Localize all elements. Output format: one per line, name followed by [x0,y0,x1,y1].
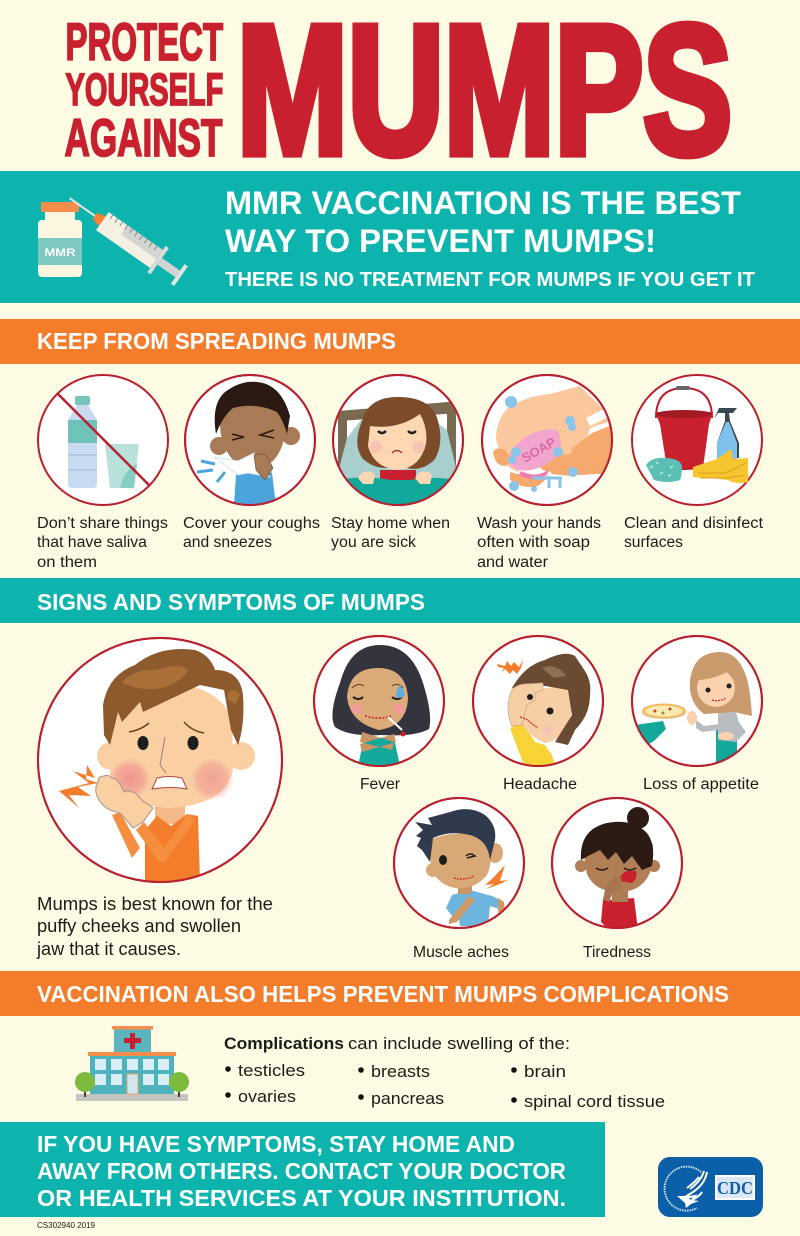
caption: wash hands: Wash your hands [477,515,601,532]
icon: boy with swollen cheeks [38,638,282,882]
caption: headache: Headache [503,776,577,793]
text block: complications list: breasts [371,1062,430,1081]
icon: MMR vaccine vial [38,202,82,277]
heading: vaccination message: THERE IS NO TREATMENT FOR MUMPS IF YOU GET IT [225,269,755,291]
icon: MMR vaccine vial: MMR [44,247,76,259]
icon: person sneezing into tissue [185,375,315,505]
caption: loss of appetite: Loss of appetite [643,776,759,793]
icon: sick girl in bed [332,374,464,506]
text block: complications list: ovaries [238,1087,296,1106]
panel: stay home callout: OR HEALTH SERVICES AT YOUR INSTITUTION. [37,1185,566,1211]
caption: clean surfaces: surfaces [624,534,683,551]
text block: complications list: spinal cord tissue [524,1092,665,1111]
caption: mumps description: puffy cheeks and swollen [37,916,241,936]
caption: stay home: Stay home when [331,515,450,532]
icon: headache [473,636,603,768]
caption: cover coughs: and sneezes [183,534,272,551]
heading: signs and symptoms: SIGNS AND SYMPTOMS OF MUMPS [37,589,425,615]
caption: mumps description: jaw that it causes. [36,939,181,959]
icon: washing hands with soap [482,375,614,505]
title: Protect yourself against mumps: YOURSELF [66,64,223,116]
panel: stay home callout: IF YOU HAVE SYMPTOMS, STAY HOME AND [37,1131,515,1157]
caption: fever: Fever [360,776,400,793]
icon: tiredness [552,798,682,930]
heading: vaccination message: WAY TO PREVENT MUMPS! [225,223,656,259]
icon: muscle aches [394,798,524,928]
icon: bucket and cleaning supplies [632,375,762,505]
text block: complications list: Complications [224,1034,344,1053]
icon: CDC logo: CDC [717,1178,753,1198]
heading: vaccination message: MMR VACCINATION IS THE BEST [225,185,741,221]
icon: washing hands with soap: SOAP [519,434,559,466]
heading: vaccination message [225,185,755,291]
heading: keep from spreading mumps: KEEP FROM SPREADING MUMPS [37,328,396,354]
icon: do not share bottle and cup [38,375,168,505]
icon: syringe [60,185,190,289]
circle outlines redrawn above artwork [38,375,762,928]
caption: don't share: Don’t share things [37,515,168,532]
heading: keep from spreading mumps [0,319,800,364]
heading: vaccination helps prevent complications [0,971,800,1016]
panel: MMR vaccination banner [0,171,800,303]
text block: complications list: can include swelling of the: [348,1034,570,1053]
footer code: CS302940 2019 [37,1221,96,1230]
caption: stay home: you are sick [331,534,416,551]
text block: complications list [224,1034,665,1111]
text block: complications list: pancreas [371,1089,444,1108]
caption: mumps description: Mumps is best known for the [37,894,273,914]
icon: CDC logo [658,1157,763,1217]
caption: tiredness: Tiredness [583,944,651,961]
icon: fever [314,636,444,766]
caption: don't share: on them [37,554,97,571]
panel: stay home callout [0,1122,605,1217]
caption: don't share: that have saliva [37,534,147,551]
icon: hospital [75,1026,189,1101]
panel: stay home callout: AWAY FROM OTHERS. CONTACT YOUR DOCTOR [37,1158,566,1184]
caption: clean surfaces: Clean and disinfect [624,515,764,532]
caption: cover coughs: Cover your coughs [183,515,320,532]
heading: vaccination helps prevent complications: VACCINATION ALSO HELPS PREVENT MUMPS COMPLICATIONS [37,981,729,1007]
caption: muscle aches: Muscle aches [413,944,509,961]
caption: wash hands: and water [477,554,548,571]
text block: complications list: brain [524,1062,566,1081]
text block: complications list: testicles [238,1061,305,1080]
heading: signs and symptoms [0,578,800,623]
icon: loss of appetite [632,636,762,766]
title: Protect yourself against mumps: PROTECT [66,13,223,72]
caption: wash hands: often with soap [477,534,590,551]
title: Protect yourself against mumps: AGAINST [64,110,222,168]
